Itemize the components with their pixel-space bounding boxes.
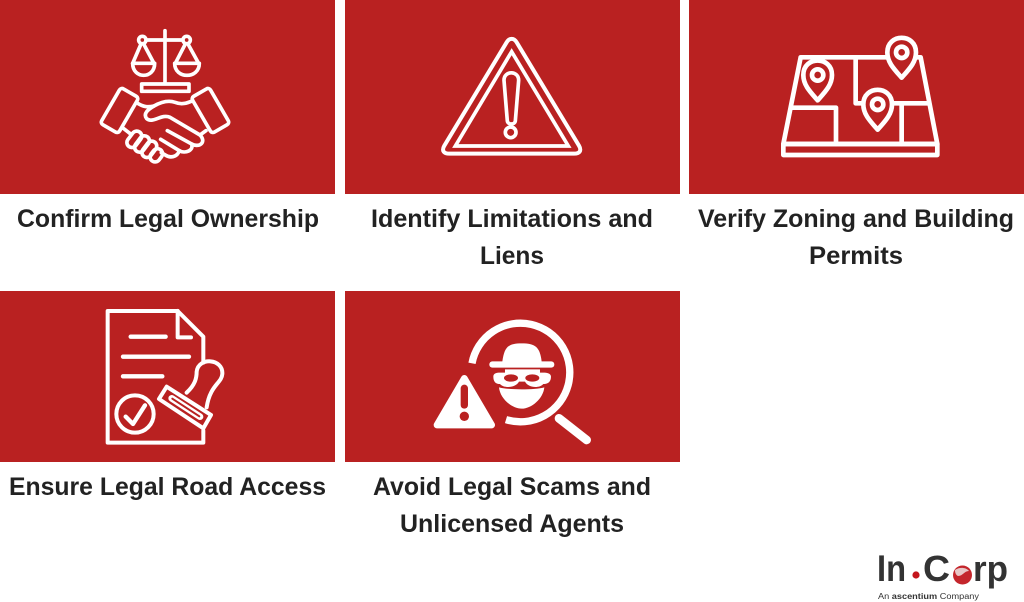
heading: confirm legal ownership: Confirm Legal Ownership [17, 205, 319, 233]
heading: identify limitations and liens [371, 205, 653, 270]
heading: verify zoning and building permits: Verify Zoning and Building [698, 205, 1014, 233]
heading: identify limitations and liens: Liens [480, 242, 544, 270]
logo: InCorp: In [877, 548, 906, 589]
icon: map with pins [783, 38, 937, 155]
panel: legal road access [0, 291, 335, 462]
heading: avoid legal scams and unlicensed agents: Unlicensed Agents [400, 510, 624, 538]
logo: InCorp: C [923, 548, 950, 589]
heading: verify zoning and building permits [698, 205, 1014, 270]
panel: confirm legal ownership [0, 0, 335, 194]
panel: avoid scams [345, 291, 680, 462]
logo: InCorp [877, 548, 1008, 601]
logo: InCorp: An ascentium Company [878, 592, 979, 601]
icon: warning triangle [443, 39, 580, 154]
heading: verify zoning and building permits: Permits [809, 242, 903, 270]
heading: avoid legal scams and unlicensed agents [373, 473, 651, 538]
heading: ensure legal road access: Ensure Legal Road Access [9, 473, 326, 501]
logo: InCorp: rp [973, 548, 1008, 589]
heading: identify limitations and liens: Identify Limitations and [371, 205, 653, 233]
icon: magnifier with spy and warning [437, 323, 587, 440]
icon: document with stamp [108, 311, 222, 443]
icon: scales and handshake [100, 31, 230, 164]
panel: identify limitations [345, 0, 680, 194]
panel: verify zoning [689, 0, 1024, 194]
heading: avoid legal scams and unlicensed agents: Avoid Legal Scams and [373, 473, 651, 501]
